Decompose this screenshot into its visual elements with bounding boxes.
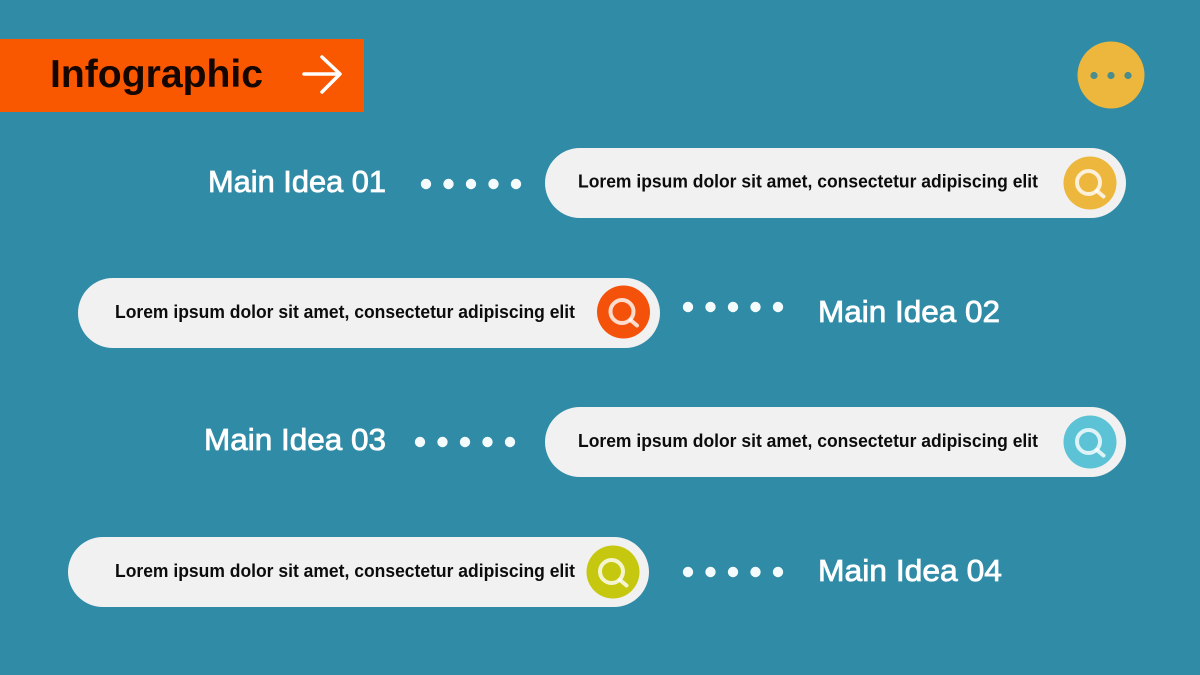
row 1: Main Idea 01 [208, 148, 1126, 218]
icon: search [597, 286, 650, 338]
icon: search [586, 546, 640, 598]
text block: Lorem ipsum dolor sit amet, consectetur adipiscing elit [578, 172, 1038, 192]
icon: search [1064, 156, 1116, 210]
text block: Lorem ipsum dolor sit amet, consectetur adipiscing elit [115, 561, 575, 581]
row 3: Main Idea 03 [204, 407, 1126, 477]
dotted connector [415, 437, 515, 447]
dotted connector [683, 302, 783, 312]
heading: Main Idea 03 [204, 422, 386, 457]
pill [78, 278, 660, 348]
dotted connector [683, 567, 783, 577]
heading: Main Idea 01 [208, 164, 386, 199]
heading: Main Idea 02 [818, 294, 1000, 329]
pill [68, 537, 649, 607]
heading: Main Idea 04 [818, 553, 1002, 588]
title: Infographic [50, 53, 263, 96]
pill [545, 407, 1126, 477]
dotted connector [421, 179, 521, 189]
header banner [0, 39, 364, 112]
icon: search [1064, 416, 1116, 468]
icon: menu dots [1078, 42, 1144, 108]
row 2: Main Idea 02 [78, 278, 1000, 348]
icon: arrow [304, 57, 340, 92]
text block: Lorem ipsum dolor sit amet, consectetur adipiscing elit [115, 302, 575, 322]
pill [545, 148, 1126, 218]
row 4: Main Idea 04 [68, 537, 1002, 607]
text block: Lorem ipsum dolor sit amet, consectetur adipiscing elit [578, 431, 1038, 451]
